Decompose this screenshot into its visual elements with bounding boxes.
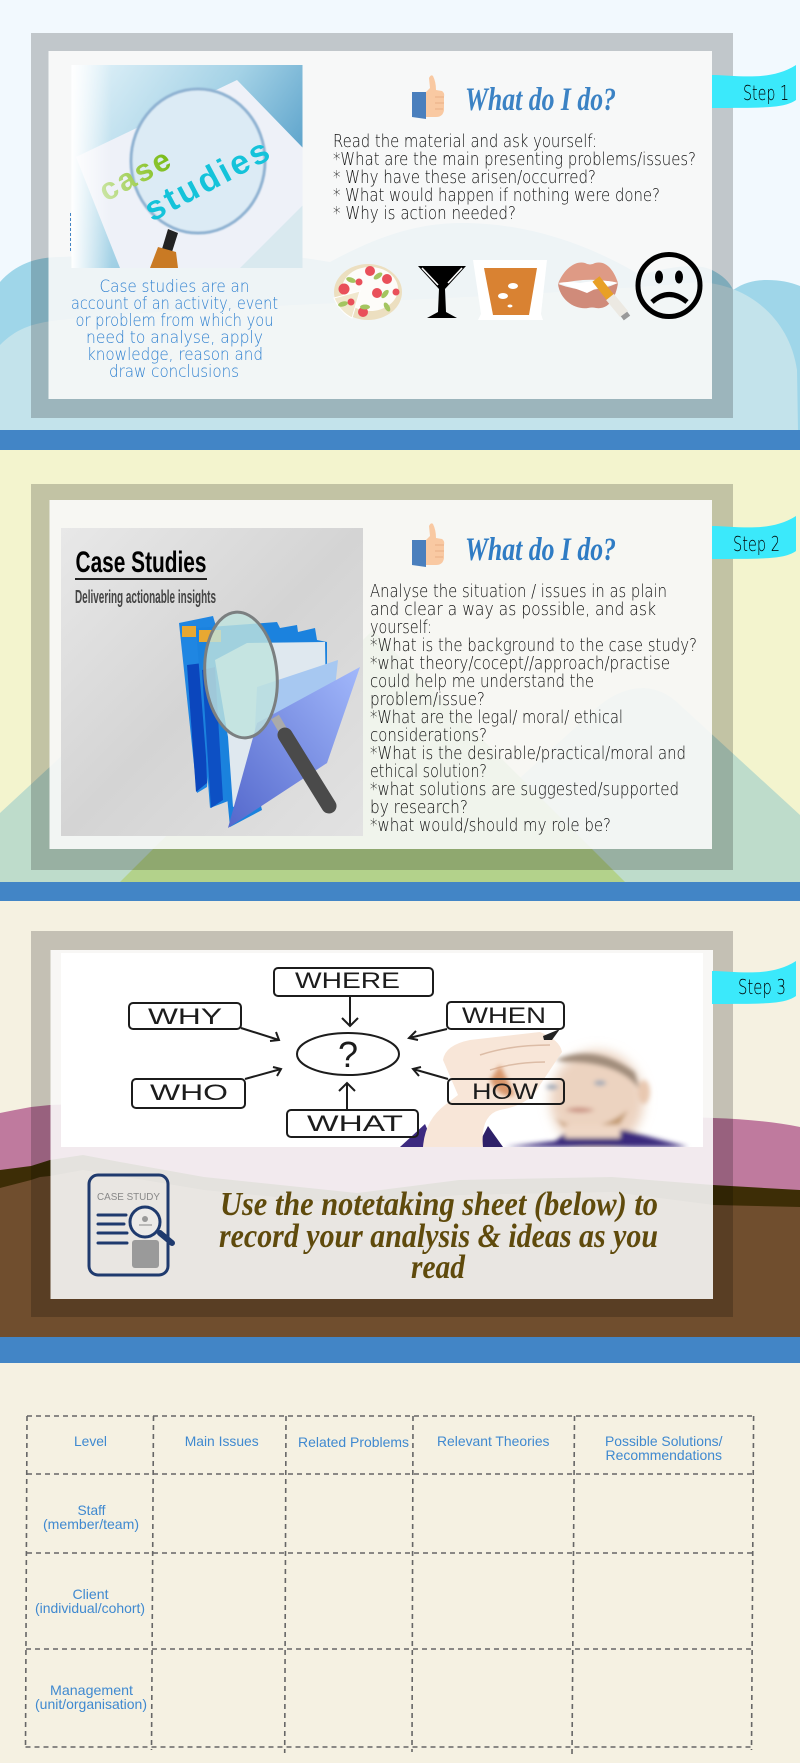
- questions text: * What would happen if nothing were done?: [333, 185, 660, 206]
- heading: what do I do: What do I do?: [465, 82, 616, 118]
- analysis questions text: *What is the desirable/practical/moral and: [370, 743, 686, 764]
- icon: case study document: CASE STUDY: [97, 1192, 160, 1203]
- table labels: Client: [72, 1586, 109, 1602]
- divider band 3: [0, 1337, 800, 1363]
- magnified lens: [131, 89, 265, 233]
- step 1 ribbon: [712, 65, 796, 108]
- table labels: (unit/organisation): [35, 1696, 147, 1712]
- table grid: [26, 1416, 754, 1755]
- analysis questions text: *what would/should my role be?: [370, 815, 611, 836]
- diagram labels: [148, 968, 546, 1136]
- photo: case studies magnifier: case: [93, 142, 176, 208]
- questions text: *What are the main presenting problems/issues?: [333, 149, 696, 170]
- table labels: Main Issues: [185, 1433, 259, 1449]
- questions text: [333, 131, 696, 224]
- step 3 ribbon: [712, 961, 796, 1004]
- divider band 2: [0, 882, 800, 901]
- step 2 outer frame: [31, 484, 733, 870]
- heading: what do I do: What do I do?: [465, 532, 616, 568]
- magnifier handle: [162, 229, 178, 252]
- analysis questions text: problem/issue?: [370, 689, 485, 710]
- photo: case studies folders: Delivering actionable insights: [75, 587, 216, 607]
- blurred man: [505, 1050, 688, 1150]
- diagram labels: WHERE: [295, 968, 400, 993]
- analysis questions text: *What is the background to the case study?: [370, 635, 697, 656]
- analysis questions text: [370, 581, 697, 836]
- table labels: Relevant Theories: [437, 1433, 550, 1449]
- step 2 inner card: [50, 500, 712, 849]
- questions text: Read the material and ask yourself:: [333, 131, 597, 152]
- step 1 outer frame: [31, 33, 733, 418]
- icon: case study document: [89, 1175, 172, 1275]
- back folders: [179, 616, 220, 793]
- step 3 outer frame: [31, 931, 733, 1317]
- photo: case studies magnifier: studies: [138, 132, 276, 229]
- table labels: Staff: [78, 1502, 106, 1518]
- table labels: Related Problems: [298, 1434, 409, 1450]
- case study definition text: account of an activity, event: [71, 294, 278, 314]
- diagram labels: WHO: [150, 1080, 228, 1105]
- diagram labels: ?: [338, 1034, 358, 1075]
- icon: beer glass: [473, 260, 547, 320]
- lens: [200, 609, 282, 741]
- handle: [275, 717, 285, 734]
- front folder: [228, 667, 360, 828]
- notetaking instruction text: read: [411, 1249, 466, 1286]
- table labels: Possible Solutions/: [605, 1433, 723, 1449]
- diagram labels: WHY: [148, 1004, 222, 1029]
- case study definition text: Case studies are an: [100, 277, 250, 297]
- notetaking table: [26, 1416, 754, 1755]
- case study definition text: or problem from which you: [76, 311, 274, 331]
- icon: lips with cigarette: [558, 262, 627, 318]
- analysis questions text: *What are the legal/ moral/ ethical: [370, 707, 623, 728]
- analysis questions text: *what solutions are suggested/supported: [370, 779, 679, 800]
- questions text: * Why is action needed?: [333, 203, 516, 224]
- case study definition text: need to analyse, apply: [86, 328, 263, 348]
- icon: sad face: [638, 254, 700, 316]
- icon: martini glass: [418, 266, 466, 318]
- panel: step 1: [31, 33, 796, 418]
- section 1 background: sky and hills: [0, 0, 800, 430]
- section 3 background: landscape: [0, 1104, 800, 1337]
- analysis questions text: and clear a way as possible, and ask: [370, 599, 656, 620]
- case study definition text: draw conclusions: [109, 362, 239, 382]
- notetaking instruction text: record your analysis & ideas as you: [219, 1218, 658, 1255]
- step 3 inner card: [50, 950, 713, 1299]
- diagram labels: WHEN: [462, 1003, 546, 1028]
- divider band 1: [0, 430, 800, 450]
- diagram labels: WHAT: [307, 1111, 403, 1136]
- photo: question diagram and man: [61, 953, 703, 1150]
- notetaking instruction text: Use the notetaking sheet (below) to: [220, 1186, 658, 1223]
- section 2 background: mountains: [0, 450, 800, 882]
- icon: pizza: [334, 264, 402, 320]
- case study definition text: knowledge, reason and: [87, 345, 263, 365]
- questions text: * Why have these arisen/occurred?: [333, 167, 596, 188]
- analysis questions text: *what theory/cocept//approach/practise: [370, 653, 670, 674]
- sleeve and arm: [400, 1124, 427, 1147]
- photo: case studies folders: [61, 528, 363, 836]
- panel: step 3: [31, 931, 796, 1317]
- analysis questions text: yourself:: [370, 617, 432, 638]
- dashed mark beside photo: [70, 213, 72, 252]
- diagram boxes: [129, 968, 564, 1137]
- diagram labels: HOW: [472, 1079, 538, 1104]
- icon: thumbs up: [412, 523, 444, 567]
- table labels: Management: [50, 1682, 133, 1698]
- table labels: [35, 1433, 723, 1712]
- step 1 inner card: [48, 51, 712, 399]
- table labels: (member/team): [43, 1516, 139, 1532]
- photo: case studies folders: Case Studies: [76, 546, 206, 579]
- case study definition text: [71, 277, 278, 382]
- step 2 ribbon: Step 2: [733, 532, 780, 556]
- icon: thumbs up: [412, 75, 444, 119]
- analysis questions text: Analyse the situation / issues in as plain: [370, 581, 667, 602]
- analysis questions text: ethical solution?: [370, 761, 487, 782]
- arrows: [342, 996, 358, 1026]
- table labels: (individual/cohort): [35, 1600, 145, 1616]
- analysis questions text: considerations?: [370, 725, 487, 746]
- photo: case studies magnifier: [72, 65, 303, 268]
- table labels: Level: [74, 1433, 107, 1449]
- step 2 ribbon: [712, 516, 796, 559]
- table labels: Recommendations: [606, 1447, 722, 1463]
- panel: step 2: [31, 484, 796, 870]
- analysis questions text: by research?: [370, 797, 468, 818]
- analysis questions text: could help me understand the: [370, 671, 594, 692]
- notetaking instruction text: [219, 1186, 658, 1286]
